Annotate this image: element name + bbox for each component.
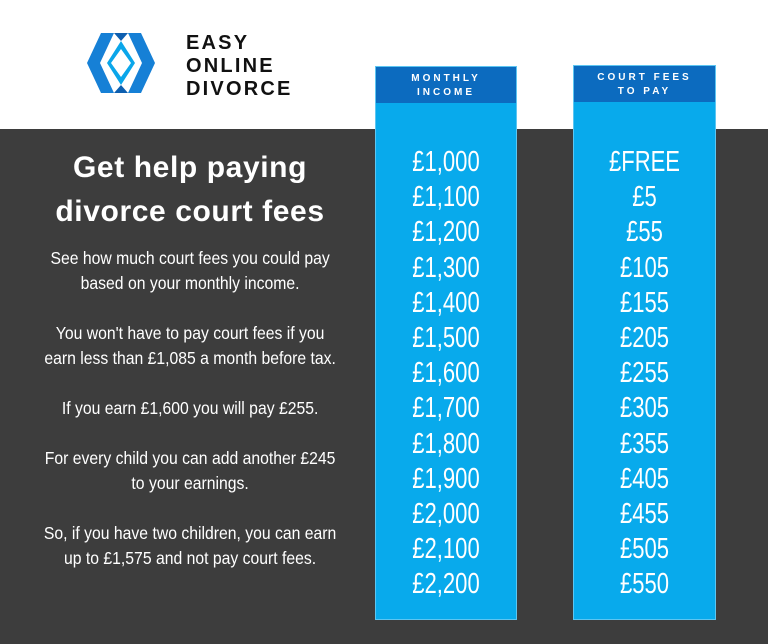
body text: earn less than £1,085 a month before tax. [44,348,336,368]
values: £1,500 [412,322,480,354]
values: £1,600 [412,357,480,389]
values: £355 [620,428,669,460]
brand name: DIVORCE [186,78,293,100]
logo [87,32,293,100]
values: £550 [620,568,669,600]
values: £2,000 [412,498,480,530]
body text: based on your monthly income. [81,273,300,293]
values: £1,200 [412,216,480,248]
brand name [186,32,293,100]
values: £455 [620,498,669,530]
values: £2,200 [412,568,480,600]
body text [44,248,336,568]
values: £55 [626,216,663,248]
body text: to your earnings. [131,473,249,493]
brand name: ONLINE [186,55,275,77]
values: £105 [620,252,669,284]
values: £2,100 [412,533,480,565]
body text: up to £1,575 and not pay court fees. [64,548,316,568]
values: £305 [620,392,669,424]
values: £155 [620,287,669,319]
values: £405 [620,463,669,495]
title: Get help paying [73,151,307,184]
header: COURT FEES [597,72,692,83]
header: INCOME [417,87,475,98]
values: £255 [620,357,669,389]
body text: For every child you can add another £245 [45,448,335,468]
header [376,67,516,103]
values: £1,000 [412,146,480,178]
body text: So, if you have two children, you can earn [44,523,336,543]
values: £1,700 [412,392,480,424]
values: £1,800 [412,428,480,460]
values: £1,300 [412,252,480,284]
title: divorce court fees [55,195,325,228]
values: £505 [620,533,669,565]
values [412,146,480,600]
header: MONTHLY [411,73,481,84]
brand name: EASY [186,32,249,54]
column: court fees [573,65,716,620]
body text: If you earn £1,600 you will pay £255. [62,398,318,418]
values: £5 [632,181,657,213]
header: TO PAY [618,86,671,97]
icon: logo mark [87,33,155,93]
values [609,146,680,600]
title [55,151,325,228]
values: £1,100 [412,181,480,213]
values: £FREE [609,146,680,178]
body text: See how much court fees you could pay [50,248,330,268]
values: £1,400 [412,287,480,319]
header [574,66,715,102]
values: £1,900 [412,463,480,495]
body text: You won't have to pay court fees if you [56,323,324,343]
values: £205 [620,322,669,354]
column: monthly income [375,66,517,620]
